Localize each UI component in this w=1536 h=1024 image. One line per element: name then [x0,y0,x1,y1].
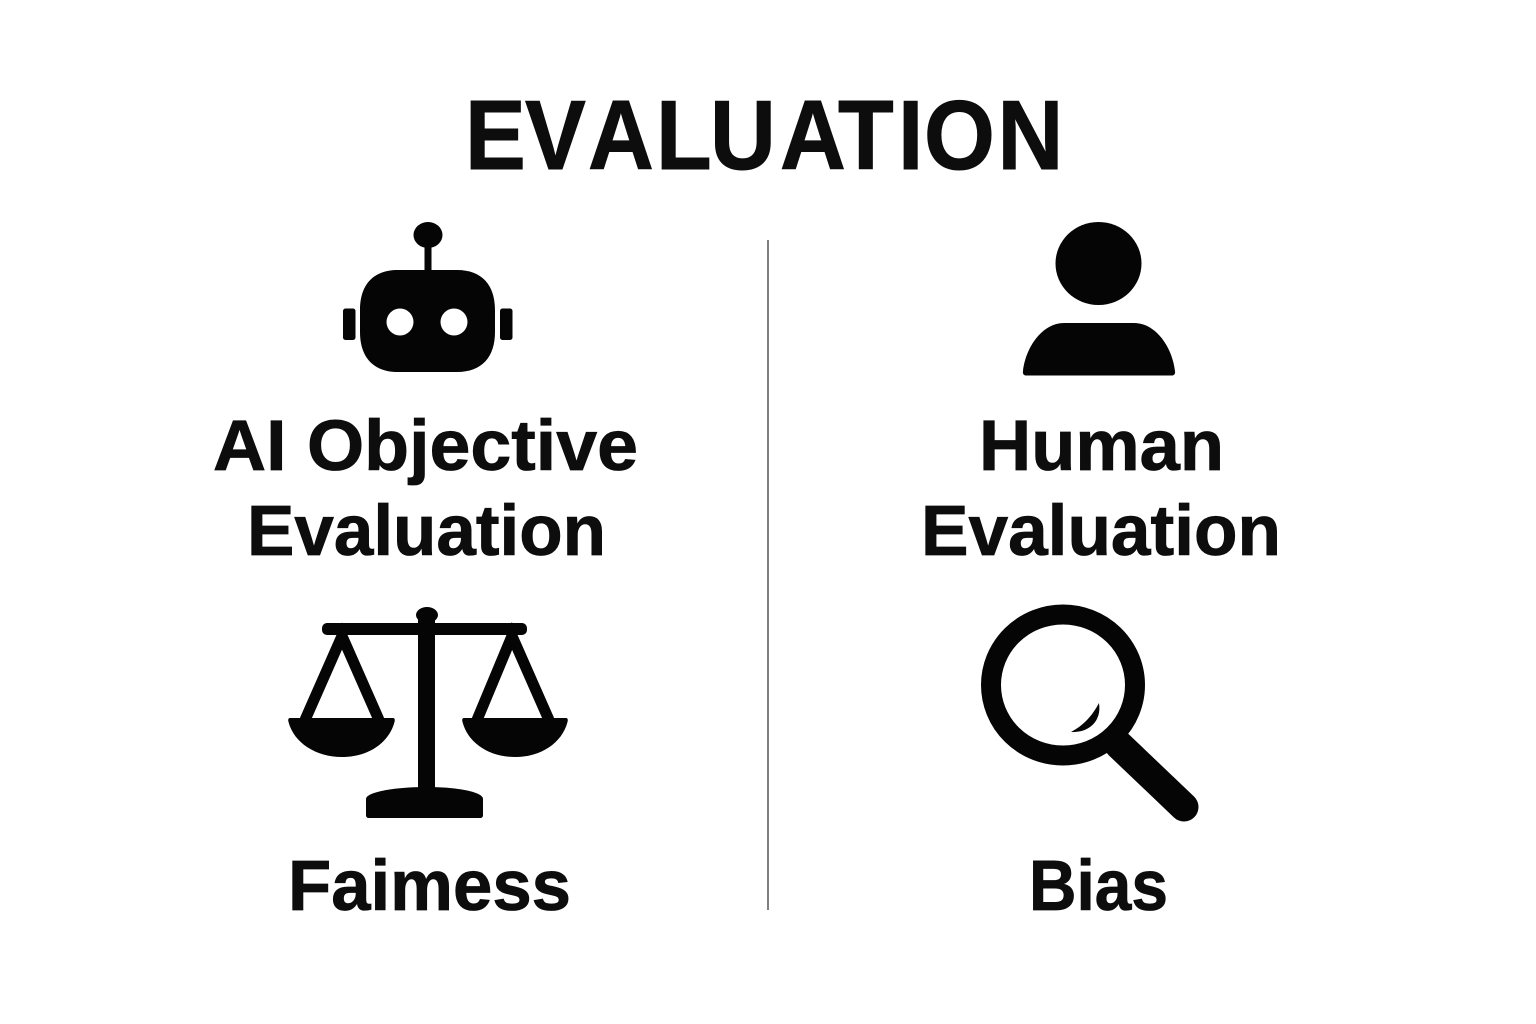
heading: AI Objective Evaluation: AI Objective [213,407,638,486]
heading: AI Objective Evaluation: Evaluation [247,492,606,571]
heading: Human Evaluation [921,407,1281,571]
icon: magnifying glass [991,614,1184,807]
label: Bias: Bias [1029,847,1168,926]
label: Faimess: Faimess [288,847,571,926]
title: EVALUATION [465,81,1063,191]
icon: robot [343,222,512,372]
panel: AI objective evaluation [213,222,638,926]
heading: Human Evaluation: Evaluation [921,492,1281,571]
heading: AI Objective Evaluation [213,407,638,571]
panel: human evaluation [921,222,1281,926]
icon: person [1023,222,1175,376]
heading: Human Evaluation: Human [979,407,1224,486]
icon: balance scale [288,607,568,818]
